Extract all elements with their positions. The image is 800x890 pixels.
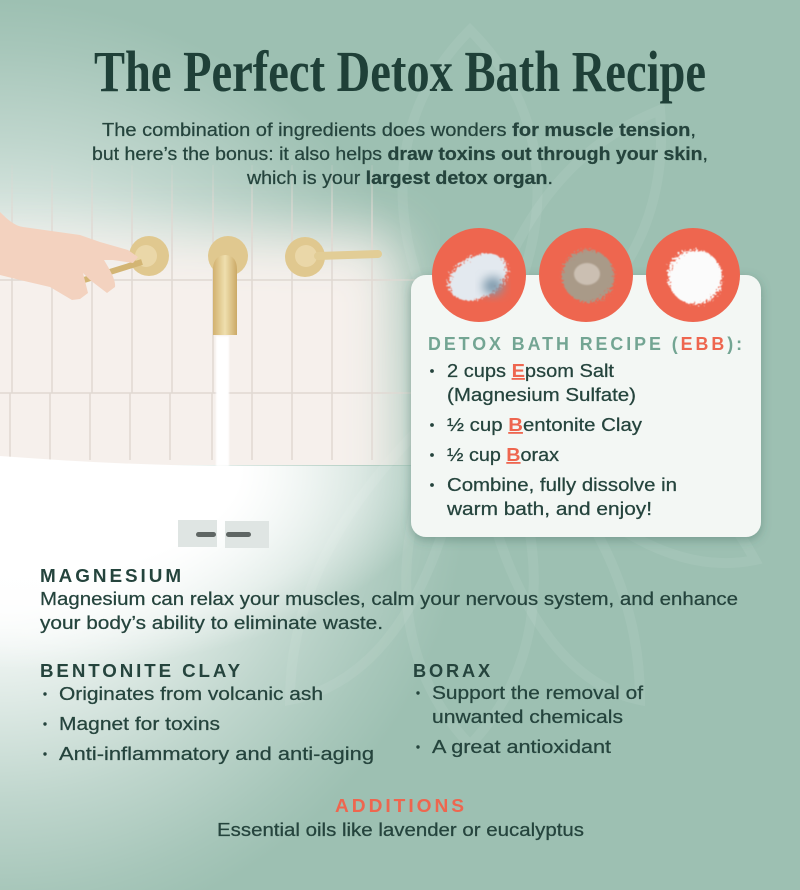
tub bbox=[0, 456, 440, 680]
magnesium section bbox=[40, 566, 738, 633]
decorative lotus watermark bbox=[290, 30, 755, 745]
icon: right faucet handle bbox=[285, 237, 378, 277]
additions section: Essential oils like lavender or eucalyptus bbox=[217, 820, 584, 840]
icon: epsom salt bbox=[432, 228, 526, 322]
icon: left faucet handle bbox=[84, 236, 169, 280]
icon: bentonite clay bbox=[539, 228, 633, 322]
panel: recipe card bbox=[411, 228, 761, 537]
recipe list bbox=[430, 361, 677, 519]
wall tiles bbox=[0, 165, 440, 465]
additions section: ADDITIONS bbox=[335, 796, 467, 816]
bentonite clay section bbox=[40, 661, 374, 764]
recipe list: warm bath, and enjoy! bbox=[446, 499, 652, 519]
magnesium section: your body’s ability to eliminate waste. bbox=[40, 613, 383, 633]
icon: hand bbox=[0, 212, 138, 300]
borax section: A great antioxidant bbox=[432, 737, 611, 757]
bentonite clay section: Magnet for toxins bbox=[59, 714, 220, 734]
bentonite clay section: Anti-inflammatory and anti-aging bbox=[59, 744, 374, 764]
icon: faucet spout bbox=[208, 236, 248, 335]
magnesium section: MAGNESIUM bbox=[40, 566, 184, 586]
intro text: The combination of ingredients does wonders for muscle tension , bbox=[102, 120, 696, 140]
recipe list: 2 cups Epsom Salt bbox=[447, 361, 614, 381]
recipe list: ½ cup Bentonite Clay bbox=[447, 415, 642, 435]
recipe list: Combine, fully dissolve in bbox=[447, 475, 677, 495]
borax section: Support the removal of bbox=[432, 683, 644, 703]
intro text: but here’s the bonus: it also helps draw toxins out through your skin , bbox=[92, 144, 708, 164]
bentonite clay section: BENTONITE CLAY bbox=[40, 661, 243, 681]
icon: overflow drain bbox=[178, 520, 269, 548]
intro text: which is your largest detox organ . bbox=[246, 168, 553, 188]
magnesium section: Magnesium can relax your muscles, calm your nervous system, and enhance bbox=[40, 589, 738, 609]
borax section bbox=[413, 661, 644, 757]
recipe list: ½ cup Borax bbox=[447, 445, 559, 465]
borax section: unwanted chemicals bbox=[432, 707, 623, 727]
recipe list: (Magnesium Sulfate) bbox=[447, 385, 636, 405]
additions section bbox=[217, 796, 584, 840]
recipe heading: DETOX BATH RECIPE (EBB): bbox=[428, 334, 745, 354]
photo: bath and faucet bbox=[0, 165, 440, 680]
bentonite clay section: Originates from volcanic ash bbox=[59, 684, 323, 704]
intro text bbox=[92, 120, 708, 188]
icon: borax bbox=[646, 228, 740, 322]
borax section: BORAX bbox=[413, 661, 493, 681]
icon: water stream bbox=[216, 336, 229, 466]
